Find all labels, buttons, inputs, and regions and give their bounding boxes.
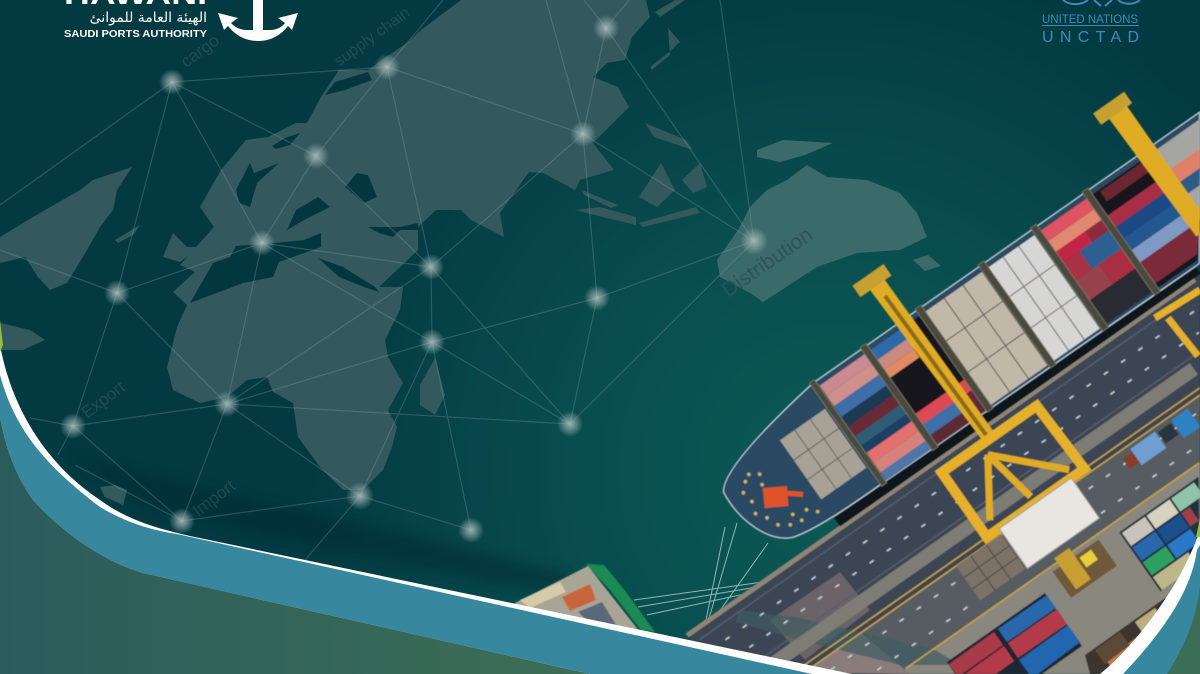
icon: anchor [218,0,298,41]
logo: UNCTAD [1042,0,1140,46]
yellow deck bollards [732,452,820,544]
coastal shadow bands [70,455,600,600]
teal band right [1123,545,1200,674]
yard surface [802,395,1200,674]
inland seas [190,72,418,303]
faint network labels: supply chain [331,4,413,70]
container ship and crane details, rotated frame [575,63,1200,674]
container stack right [1119,477,1200,591]
container bay C [925,272,1047,405]
tinted road patch [770,572,870,660]
container bay A [820,353,932,481]
quay roadway [686,273,1200,674]
container bay D [988,235,1100,361]
yellow spreader on quay [1047,531,1117,598]
faint network labels: Distribution [718,223,817,302]
container bay E [1041,198,1152,324]
quay edge [686,278,1196,638]
continent: North America [0,167,132,290]
green corner right [1167,587,1200,674]
parked grid container block [956,535,1025,601]
container bay G [1152,119,1200,220]
quay crane two [1093,92,1200,244]
continents: Eurasia and Africa [167,0,650,490]
UNCTAD label: UNCTAD [1042,29,1139,46]
faint network labels: Import [189,476,239,520]
logo Arabic name: الهيئة العامة للموانئ [90,10,207,26]
continent: Australia and New Guinea [717,140,941,302]
quay crane two legs [1155,290,1200,356]
orange deck machinery [755,470,805,519]
teal band left [0,375,812,674]
concrete terminal apron [898,462,1200,674]
white swoosh left [0,345,852,674]
blue truck [1120,409,1200,474]
container bay F [1092,157,1200,288]
road bands and lane dashes [700,289,1200,674]
logistics network lines [0,0,754,560]
quay crane one [825,237,1084,537]
small green vessel [515,564,655,655]
port photo [575,63,1200,674]
mooring ropes [634,523,768,626]
United Nations label: UNITED NATIONS [1042,14,1138,26]
white swoosh right [1100,530,1200,674]
tinted yard patch [805,632,910,674]
green corner left [0,417,590,674]
faint network labels: Export [78,377,129,422]
hull and bow [701,112,1200,563]
container bay B [870,316,986,445]
label divider [1042,25,1139,26]
hatch gantries [809,146,1200,486]
logo English name: SAUDI PORTS AUTHORITY [64,28,207,40]
islands and smaller land [0,0,707,505]
lime edge slivers [0,320,1200,537]
bow cargo grid [780,409,866,499]
yard container strip [1085,598,1180,674]
icon: UN emblem fragment [1063,0,1140,6]
world map silhouettes [0,0,941,505]
cross shadow on quay [735,610,960,665]
dark water shadow under hull [832,262,1200,526]
faint network labels [78,4,817,520]
white crane machinery roof [999,478,1099,569]
container stack lower [947,593,1082,674]
logo: Saudi Ports Authority [64,0,298,41]
network nodes [60,15,768,543]
faint network labels: cargo [177,31,223,71]
